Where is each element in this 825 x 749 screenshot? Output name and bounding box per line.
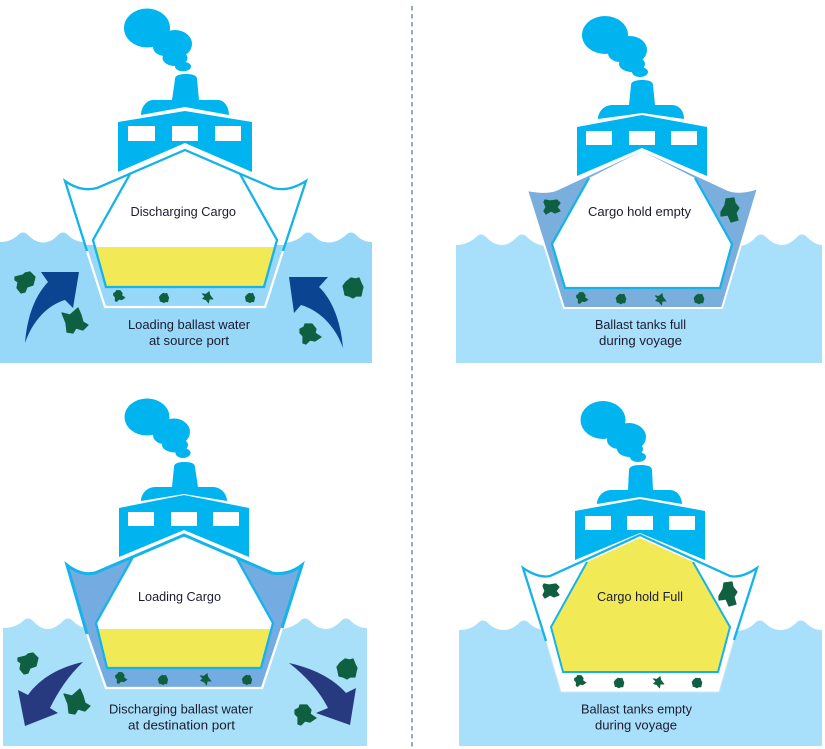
windows xyxy=(128,126,241,141)
organisms xyxy=(15,272,363,344)
organisms xyxy=(18,653,357,725)
bridge xyxy=(575,499,705,560)
hull with full ballast tanks xyxy=(527,150,758,308)
water xyxy=(3,618,367,746)
panel: loading cargo, discharging ballast water xyxy=(3,398,367,746)
arrow: left, water flowing in xyxy=(25,272,79,343)
water xyxy=(0,232,372,363)
hull xyxy=(65,150,306,307)
label: during voyage: during voyage xyxy=(595,718,677,732)
smoke xyxy=(124,8,192,71)
bridge xyxy=(118,111,252,172)
water xyxy=(459,620,822,746)
funnel and roof xyxy=(598,80,684,119)
label: discharging ballast water: Discharging ballast water xyxy=(109,702,253,716)
organisms xyxy=(543,582,737,688)
water xyxy=(456,234,822,363)
label: ballast tanks full: Ballast tanks full xyxy=(595,318,686,332)
bridge xyxy=(577,115,707,176)
cargo hold, full xyxy=(551,538,730,672)
bridge xyxy=(119,495,249,557)
panel: cargo hold full, ballast tanks empty xyxy=(459,401,822,746)
cargo hold xyxy=(96,535,273,668)
arrow: right, water flowing in xyxy=(289,277,343,348)
label: loading cargo: Loading Cargo xyxy=(138,590,221,604)
funnel and roof xyxy=(597,465,682,504)
ship xyxy=(527,16,758,308)
ship xyxy=(65,8,306,307)
panel: cargo hold empty, ballast tanks full xyxy=(456,16,822,363)
windows xyxy=(586,131,697,145)
label: during voyage: during voyage xyxy=(599,334,682,348)
smoke xyxy=(124,398,190,458)
funnel and roof xyxy=(141,74,229,115)
smoke xyxy=(580,401,646,462)
cargo hold xyxy=(93,150,277,287)
label: cargo hold full: Cargo hold Full xyxy=(597,590,683,604)
label: loading ballast water: Loading ballast water xyxy=(128,318,250,332)
label: at source port: at source port xyxy=(149,334,230,348)
arrow: right, water flowing out xyxy=(289,663,356,725)
arrow: left, water flowing out xyxy=(18,662,83,726)
windows xyxy=(585,516,695,530)
smoke xyxy=(582,16,648,77)
ship xyxy=(523,401,757,692)
cargo hold xyxy=(552,151,732,288)
label: discharging cargo: Discharging Cargo xyxy=(130,205,236,219)
hull with full ballast tanks xyxy=(67,535,302,688)
label: at destination port: at destination port xyxy=(128,718,236,732)
organisms xyxy=(544,198,739,305)
panel: discharging cargo, loading ballast water xyxy=(0,8,372,363)
windows xyxy=(128,512,239,526)
hull xyxy=(523,535,757,692)
funnel and roof xyxy=(141,462,227,501)
ship xyxy=(67,398,302,688)
label: cargo hold empty: Cargo hold empty xyxy=(588,205,692,219)
label: ballast tanks empty: Ballast tanks empty xyxy=(581,702,693,716)
